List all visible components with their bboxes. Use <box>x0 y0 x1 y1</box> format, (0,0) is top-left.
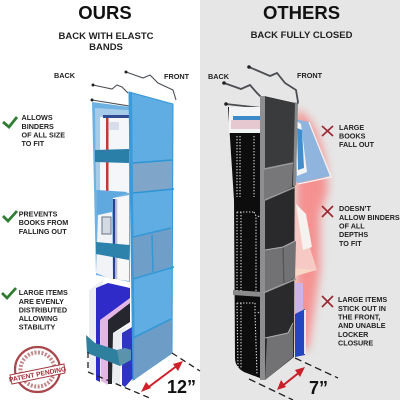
callout: allows binders: OF ALL SIZE <box>22 130 65 140</box>
middle books <box>96 195 129 281</box>
books visible at back <box>229 107 261 133</box>
icon: cross 3 <box>322 296 333 307</box>
falling books middle <box>295 204 317 276</box>
callout: allows binders: BINDERS <box>22 122 54 131</box>
falling books lower <box>295 283 306 357</box>
callout: doesn't allow binders: DEPTHS <box>339 230 368 239</box>
icon: cross 2 <box>322 206 333 217</box>
elastic band 2 <box>96 242 130 260</box>
stamp: patent pending: PATENT PENDING <box>9 366 67 384</box>
callout: large items stick out: THE FRONT, <box>338 312 380 322</box>
hanger wires <box>92 72 176 106</box>
shelf 2 back <box>97 190 128 215</box>
right frame top <box>293 102 298 186</box>
label: back (others): BACK <box>208 72 230 81</box>
lower binders <box>89 280 133 387</box>
callout: doesn't allow binders: DOESN’T <box>339 204 372 213</box>
callout: large items distributed: ARE EVENLY <box>19 297 64 306</box>
callout: large books fall out: FALL OUT <box>339 140 375 149</box>
callout: large items stick out: LOCKER <box>338 330 369 339</box>
seams and pockets <box>133 161 172 193</box>
callout: large items distributed: STABILITY <box>19 322 56 332</box>
callout: doesn't allow binders: TO FIT <box>339 239 362 248</box>
icon: check mark 2 <box>3 211 17 221</box>
callout: large items stick out: LARGE ITEMS <box>338 295 387 304</box>
grey shelf divider <box>233 290 263 297</box>
dimension: 12 inch: 12” <box>167 377 196 397</box>
callout: prevents books: FALLING OUT <box>19 227 67 236</box>
heading: others: OTHERS <box>263 2 340 23</box>
subheading: back with elastic bands: BANDS <box>89 42 123 53</box>
organizer: others (grey and black, closed back) <box>222 65 331 380</box>
back panel <box>92 102 130 282</box>
label: back (ours): BACK <box>54 71 76 80</box>
upper books <box>100 115 129 193</box>
subheading: back with elastic bands: BACK WITH ELASTC <box>58 31 154 42</box>
callout: large items distributed: ALLOWING <box>19 314 58 323</box>
hanger wires <box>224 67 298 110</box>
red glow <box>296 110 328 350</box>
white stitching <box>237 136 262 378</box>
dimension: 7 inch <box>249 358 338 400</box>
organizer: ours (blue, open back) <box>86 70 176 387</box>
panel: others background <box>200 0 400 400</box>
stamp: patent pending <box>9 347 67 392</box>
icon: cross 1 <box>322 126 333 136</box>
callout: large books fall out: BOOKS <box>339 132 366 140</box>
panel: ours background <box>0 0 200 400</box>
icon: check mark 1 <box>3 117 17 127</box>
label: front (ours): FRONT <box>164 72 190 81</box>
shelf seams <box>263 163 296 293</box>
front panel <box>129 92 173 380</box>
callout: doesn't allow binders: OF ALL <box>339 222 365 230</box>
callout: large items stick out: STICK OUT IN <box>338 304 386 313</box>
callout: large items distributed: DISTRIBUTED <box>19 306 67 314</box>
icon: check mark 3 <box>2 288 16 298</box>
middle pocket <box>265 241 296 292</box>
front panel dark <box>264 96 295 380</box>
subheading: back fully closed: BACK FULLY CLOSED <box>251 30 353 41</box>
callout: large books fall out: LARGE <box>339 123 364 132</box>
elastic band 1 <box>95 149 129 163</box>
heading: ours: OURS <box>78 2 132 23</box>
front frame left <box>260 96 265 380</box>
dimension: 7 inch: 7” <box>309 378 328 398</box>
callout: large items stick out: AND UNABLE <box>338 321 386 330</box>
front panel left edge <box>129 92 135 380</box>
callout: prevents books: PREVENTS <box>19 210 58 218</box>
elastic band 3 <box>86 335 131 366</box>
callout: doesn't allow binders: ALLOW BINDERS <box>339 213 400 222</box>
upper pocket <box>264 163 293 200</box>
falling books top <box>293 119 331 184</box>
callout: large items distributed: LARGE ITEMS <box>19 288 68 297</box>
callout: allows binders: TO FIT <box>22 139 45 148</box>
lower pocket <box>265 325 293 380</box>
dimension: 12 inch <box>88 352 200 399</box>
label: front (others): FRONT <box>297 71 323 80</box>
back panel <box>228 107 265 380</box>
callout: prevents books: BOOKS FROM <box>19 218 68 227</box>
callout: allows binders: ALLOWS <box>22 113 53 122</box>
callout: large items stick out: CLOSURE <box>338 338 373 348</box>
